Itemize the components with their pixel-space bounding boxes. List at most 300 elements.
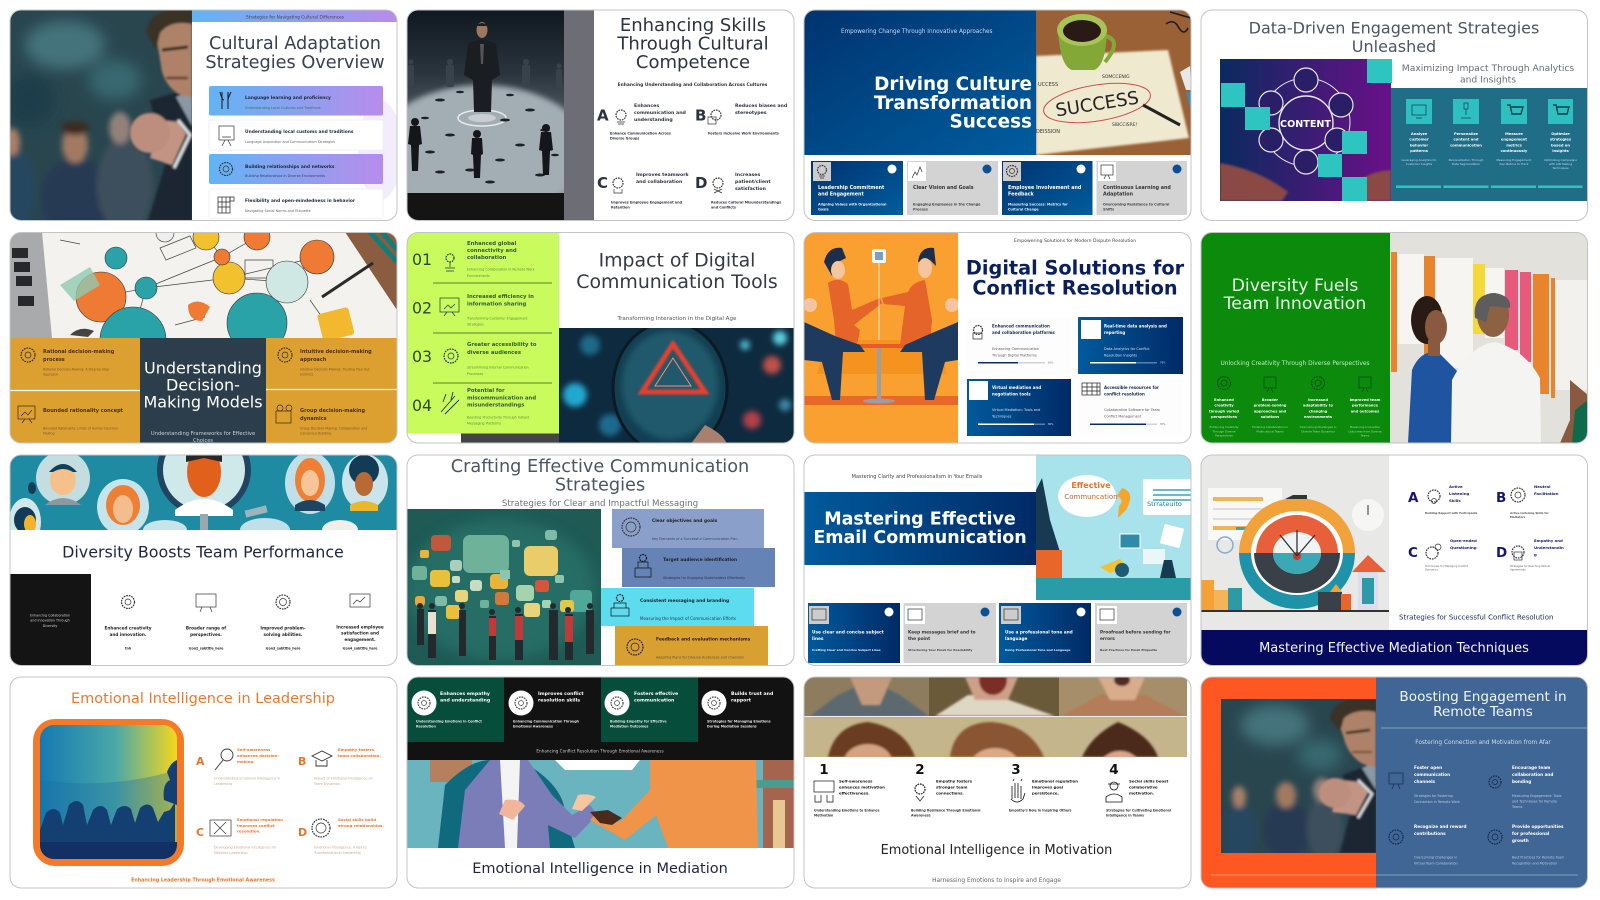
column: performance: performance bbox=[1352, 404, 1378, 408]
card: Impact of Digital Communication Tools bbox=[407, 232, 794, 454]
item 4: Intelligence in Teams bbox=[1106, 814, 1144, 818]
item: team bonding: and Techniques for Remote bbox=[1512, 800, 1557, 804]
card: Emotional Intelligence in Leadership bbox=[10, 677, 397, 888]
item: group: dynamics bbox=[300, 416, 327, 422]
tip: professional tone: language bbox=[1005, 636, 1028, 642]
feature card: learning: Adaptation bbox=[1103, 192, 1134, 198]
icon: tools tile bbox=[210, 820, 231, 836]
column: creativity: Perspectives bbox=[1215, 434, 1233, 438]
column: adaptability: Diverse Team Dynamics bbox=[1301, 429, 1335, 433]
item 04: misunderstandings bbox=[467, 403, 524, 409]
title: Cultural Adaptation bbox=[209, 34, 381, 54]
item: empathy: Understanding Emotions in Conflict bbox=[416, 720, 482, 724]
progress bars bbox=[1396, 186, 1582, 188]
item: open channels: Foster open bbox=[1414, 765, 1442, 770]
column: performance: Measuring Innovation bbox=[1350, 425, 1380, 429]
tip: brief messages: Structuring Your Email for Readability bbox=[908, 648, 972, 652]
item A: Enhance Communication Across bbox=[610, 132, 671, 136]
icon: gear bulb bbox=[1511, 488, 1525, 502]
item A bbox=[597, 103, 686, 140]
item: growth: growth bbox=[1512, 838, 1529, 843]
tip: proofread: errors bbox=[1100, 636, 1115, 642]
feature: mediation: Virtual mediation and bbox=[992, 385, 1041, 390]
item 04: Boosting Productivity Through Instant bbox=[467, 416, 530, 420]
icon: badge bbox=[412, 690, 436, 716]
column: problem solving: Fostering Collaboration in bbox=[1252, 425, 1288, 429]
icon: gears bbox=[1489, 776, 1501, 788]
icon: gear bulb bbox=[1218, 376, 1230, 390]
title: Crafting Effective Communication bbox=[451, 457, 749, 477]
icon: lightbulb tile bbox=[813, 162, 831, 181]
item C: C bbox=[196, 826, 204, 839]
item: flexibility: Navigating Social Norms and Etiquette bbox=[245, 209, 311, 213]
black side panel bbox=[10, 574, 91, 666]
feature: real-time data: Data Analytics for Conflict bbox=[1104, 347, 1150, 351]
item A: Self-awareness bbox=[237, 747, 271, 752]
title: Diversity Fuels bbox=[1232, 276, 1358, 296]
photo: six frustrated faces bbox=[804, 665, 1187, 783]
item: analyze: Customer Insights bbox=[1406, 162, 1433, 166]
title: Email Communication bbox=[813, 528, 1027, 548]
item: conflict skills: Improves conflict bbox=[538, 691, 584, 697]
item D: Strategies for Reaching Mutual bbox=[1510, 564, 1550, 568]
item: measure bbox=[1496, 99, 1532, 166]
title: Transformation bbox=[874, 93, 1032, 114]
card: Digital Solutions for Conflict Resolution bbox=[803, 232, 1191, 443]
item B: stereotypes bbox=[735, 110, 767, 116]
item: optimize: based on bbox=[1551, 143, 1570, 147]
title: Data-Driven Engagement Strategies bbox=[1249, 18, 1539, 38]
item 2: Empathy fosters bbox=[936, 778, 973, 784]
item: team bonding: Encourage team bbox=[1512, 765, 1551, 770]
icon: chart bbox=[350, 594, 370, 607]
item A: communication and bbox=[634, 110, 686, 116]
top band with subtitle: Strategies for Navigating Cultural Differences bbox=[246, 14, 345, 20]
item: recognition: Recognize and reward bbox=[1414, 824, 1466, 829]
feature: real-time data: Real-time data analysis and bbox=[1104, 324, 1167, 328]
item: team bonding: bonding bbox=[1512, 779, 1531, 784]
item 4: Social skills boost bbox=[1129, 778, 1168, 784]
item B bbox=[695, 103, 787, 136]
item: optimize: insights bbox=[1552, 149, 1570, 153]
item: measure: continuously bbox=[1501, 149, 1528, 153]
centre title panel bbox=[140, 338, 266, 443]
item C: Emotional regulation bbox=[237, 817, 283, 822]
icon: gear A bbox=[276, 595, 290, 609]
item: empathy bbox=[412, 690, 490, 728]
tagline: Mastering Clarity and Professionalism in Your Emails bbox=[852, 474, 983, 480]
item C: Improves teamwork bbox=[636, 172, 690, 178]
column: creativity: through varied bbox=[1209, 409, 1240, 413]
item: communication: communication bbox=[634, 698, 674, 704]
item D: satisfaction bbox=[735, 186, 766, 192]
item C: Open-ended bbox=[1450, 538, 1477, 543]
icon: lightbulb bbox=[915, 784, 925, 801]
item: language learning bbox=[209, 86, 383, 116]
item C: Improves Employee Engagement and bbox=[611, 200, 683, 204]
item: open channels: channels bbox=[1414, 779, 1436, 784]
column: creativity: Enhanced creativity bbox=[105, 626, 152, 630]
item A: Understanding Emotional Intelligence in bbox=[214, 776, 280, 780]
icon: gear A bbox=[312, 819, 330, 837]
item 1: Understanding Emotions to Enhance bbox=[814, 808, 880, 812]
feature card: involvement: Cultural Change bbox=[1008, 207, 1039, 211]
item: trust bbox=[702, 690, 773, 728]
title: Emotional Intelligence in Motivation bbox=[881, 843, 1112, 858]
illustration: silhouettes in orange frame bbox=[33, 719, 184, 866]
column: creativity: Enhancing Creativity bbox=[1209, 425, 1239, 429]
column: adaptability: adaptability to bbox=[1303, 404, 1333, 408]
tip: professional tone bbox=[999, 603, 1091, 663]
tip: professional tone: Using Professional Tone and Language bbox=[1005, 648, 1070, 652]
card: Mastering Effective Email Communication bbox=[804, 455, 1191, 666]
item 3: Emotional regulation bbox=[1032, 778, 1078, 784]
column: creativity bbox=[1209, 376, 1240, 438]
column: performance: Outcomes from Diverse bbox=[1348, 429, 1382, 433]
card: Cultural Adaptation Strategies Overview bbox=[10, 10, 396, 220]
item: optimize: Optimize bbox=[1551, 132, 1570, 136]
item A: understanding bbox=[634, 117, 673, 123]
feature: real-time data: 70% bbox=[1160, 360, 1166, 364]
tip: subject lines: Use clear and concise subject bbox=[812, 630, 884, 636]
icon: board tile bbox=[1098, 162, 1116, 181]
item: analyze: patterns bbox=[1410, 149, 1429, 153]
item 02: Transforming Customer Engagement bbox=[466, 316, 528, 320]
box: objectives: Clear objectives and goals bbox=[652, 518, 718, 524]
subtitle: Maximizing Impact Through Analytics bbox=[1402, 63, 1574, 74]
icon: gears bbox=[1488, 830, 1502, 844]
item: bounded: Bounded rationality concept bbox=[43, 408, 124, 414]
box: messaging: Consistent messaging and branding bbox=[640, 598, 729, 604]
icon: team bbox=[613, 178, 623, 193]
photo: coffee and SUCCESS notebook: SUCCESS bbox=[1054, 88, 1140, 121]
item: empathy: Enhances empathy bbox=[440, 691, 490, 697]
icon: gear A bbox=[622, 518, 640, 536]
feature: resources: Collaborative Software for Team bbox=[1104, 408, 1161, 412]
column: problem solving: solutions bbox=[1261, 415, 1279, 419]
item: group: Group Decision-Making: Collaboration and bbox=[300, 426, 367, 430]
item: growth: for professional bbox=[1512, 831, 1550, 836]
box: feedback: Feedback and evaluation mechanisms bbox=[656, 636, 751, 642]
item 01: Environments bbox=[467, 274, 490, 278]
item C: Developing Emotional Intelligence for bbox=[214, 846, 277, 850]
item 03 bbox=[412, 342, 537, 376]
feature: platforms bbox=[966, 317, 1071, 374]
feature card: leadership: Leadership Commitment bbox=[818, 185, 885, 191]
icon: gear A bbox=[278, 348, 292, 362]
item D: D bbox=[298, 826, 307, 839]
item: group: Consensus Building bbox=[300, 431, 331, 435]
title: Remote Teams bbox=[1433, 704, 1533, 720]
item 3: Empathy's Role in Inspiring Others bbox=[1009, 808, 1072, 812]
item: recognition: Virtual Team Collaboration bbox=[1414, 862, 1458, 866]
item D: Understandin bbox=[1534, 545, 1564, 550]
item: rational: Rational Decision-Making: A Step-by-Step bbox=[43, 368, 109, 372]
item: open channels bbox=[1389, 765, 1460, 804]
icon: presentation board bbox=[1389, 773, 1403, 789]
item 1: enhances motivation bbox=[839, 784, 885, 790]
blue hero panel bbox=[804, 10, 1036, 155]
box: audience: Strategies for Engaging Stakeholders Effectively bbox=[663, 576, 745, 580]
box: feedback bbox=[615, 626, 768, 666]
item: trust: rapport bbox=[731, 698, 752, 704]
column: problem solving: approaches and bbox=[1254, 409, 1287, 413]
feature card: leadership: and Engagement bbox=[818, 192, 864, 198]
icon: board bbox=[196, 594, 216, 612]
feature: platforms: Enhanced communication bbox=[992, 324, 1050, 328]
item B bbox=[298, 747, 381, 786]
illustration: dial gauge bbox=[1201, 455, 1389, 630]
item 04: Messaging Platforms bbox=[467, 422, 501, 426]
icon: chart board bbox=[1359, 377, 1371, 392]
illustration: two people talking bbox=[407, 760, 794, 848]
band caption: Enhancing Conflict Resolution Through Emotional Awareness bbox=[536, 748, 664, 754]
icon: badge bbox=[702, 690, 726, 716]
icon: chart tile bbox=[908, 162, 926, 181]
feature card: learning: Overcoming Resistance to Cultural bbox=[1103, 202, 1169, 206]
item: recognition bbox=[1389, 824, 1466, 866]
icon: network bbox=[444, 349, 458, 363]
item A: Enhances bbox=[634, 103, 659, 109]
illustration: effective communication scene: Effective bbox=[1071, 481, 1111, 490]
subtitle: Choices bbox=[193, 438, 213, 444]
title bar: Mastering Effective Mediation Techniques bbox=[1259, 641, 1529, 656]
item D: Agreements bbox=[1510, 568, 1526, 572]
item 03: 03 bbox=[412, 347, 432, 366]
item C: Effective Leadership bbox=[214, 851, 248, 855]
item: optimize bbox=[1544, 99, 1577, 170]
box: audience: Target audience identification bbox=[663, 557, 737, 563]
item: personalize: Data Segmentation bbox=[1452, 162, 1480, 166]
item: group: Group decision-making bbox=[300, 408, 365, 414]
item C: resolution. bbox=[237, 829, 261, 834]
box: audience bbox=[622, 548, 775, 587]
item A: enhances decision- bbox=[237, 753, 279, 758]
item D: D bbox=[1496, 545, 1507, 561]
illustration: effective communication scene: Communcation bbox=[1064, 493, 1118, 501]
box: objectives bbox=[612, 509, 764, 548]
item: optimize: Techniques bbox=[1551, 166, 1569, 170]
item: measure: Key Metrics to Track bbox=[1500, 162, 1529, 166]
tagline: Empowering Change Through Innovative Approaches bbox=[841, 29, 993, 35]
item D: Transformational Leadership bbox=[313, 851, 361, 855]
item: flexibility bbox=[209, 189, 383, 218]
photo: colleagues reviewing a wall board bbox=[1390, 232, 1588, 443]
item 1: Motivation bbox=[814, 814, 834, 818]
item: rational: Approach bbox=[43, 372, 58, 376]
feature: mediation: negotiation tools bbox=[992, 392, 1031, 396]
item D: Empathy and bbox=[1534, 538, 1563, 543]
photo: sketched mind map on desk bbox=[10, 224, 397, 373]
item: communication: Mediation Outcomes bbox=[610, 724, 648, 728]
photo: coffee and SUCCESS notebook bbox=[1036, 10, 1191, 155]
icon: cart bbox=[1507, 105, 1523, 114]
item: language learning: Understanding Local Customs and Traditions bbox=[245, 106, 321, 110]
item B: Mediators bbox=[1510, 515, 1526, 519]
item: local customs: Understanding local customs and traditions bbox=[245, 129, 354, 135]
item: measure: metrics bbox=[1506, 143, 1523, 147]
feature card: vision: Engaging Employees in the Change bbox=[913, 202, 981, 206]
item: bounded: Making bbox=[43, 431, 54, 435]
item: conflict skills: resolution skills bbox=[538, 698, 580, 704]
box: objectives: Key Elements of a Successful Communication Plan bbox=[652, 537, 738, 541]
icon: graduation cap bbox=[312, 751, 332, 766]
feature: platforms: Enhancing Communication bbox=[992, 347, 1039, 351]
item B: Active Listening Skills for bbox=[1510, 511, 1549, 515]
black side panel: and Innovation Through bbox=[30, 619, 70, 623]
item C: improves conflict bbox=[237, 823, 275, 828]
item 04: miscommunication and bbox=[467, 395, 536, 401]
item: growth: Recognition and Motivation bbox=[1512, 862, 1557, 866]
column: satisfaction: satisfaction and bbox=[341, 631, 379, 636]
box: feedback: Adapting Plans for Diverse Audiences and Channels bbox=[656, 656, 744, 660]
item 1: effectiveness. bbox=[839, 790, 870, 796]
item 1: Self-awareness bbox=[839, 778, 873, 784]
title: Strategies Overview bbox=[205, 53, 385, 73]
item A: Diverse Groups bbox=[610, 136, 639, 140]
item C: C bbox=[1408, 545, 1418, 561]
item 4: Strategies for Cultivating Emotional bbox=[1106, 808, 1171, 812]
card: Driving Culture Transformation Success bbox=[804, 10, 1191, 221]
feature: real-time data: reporting bbox=[1104, 330, 1125, 335]
item: conflict skills: Emotional Awareness bbox=[513, 724, 553, 728]
item: rational bbox=[21, 348, 115, 376]
icon: gear A bbox=[1312, 376, 1324, 390]
item D: D bbox=[695, 174, 707, 192]
item C bbox=[196, 817, 283, 855]
item A: Skills bbox=[1449, 498, 1461, 503]
column: creativity: Enhanced bbox=[1214, 398, 1234, 402]
column: creativity: and innovation. bbox=[110, 632, 147, 637]
icon: tile bbox=[1081, 320, 1101, 339]
item 4: collaborative bbox=[1129, 784, 1158, 790]
item B: B bbox=[1496, 490, 1506, 506]
item 2: 2 bbox=[915, 762, 925, 778]
title: Competence bbox=[636, 52, 750, 73]
item D: patient/client bbox=[735, 179, 771, 185]
item B: Fosters Inclusive Work Environments bbox=[708, 132, 779, 136]
icon: utensils bbox=[220, 92, 231, 109]
icon: gear bulb bbox=[122, 596, 134, 608]
item D: strong relationships. bbox=[338, 823, 384, 828]
subtitle: Understanding Frameworks for Effective bbox=[151, 431, 255, 437]
icon: worker bbox=[1106, 782, 1122, 802]
icon: brain and target bbox=[1426, 544, 1441, 559]
feature: platforms: Through Digital Platforms bbox=[991, 353, 1037, 357]
column: adaptability: environments bbox=[1304, 415, 1332, 419]
item 2 bbox=[911, 762, 980, 818]
item C: and collaboration bbox=[636, 179, 682, 185]
column: creativity: creativity bbox=[1214, 404, 1234, 408]
feature card: leadership bbox=[811, 161, 903, 215]
item: bounded: Bounded Rationality: Limits of Human Decision- bbox=[43, 426, 119, 430]
item A bbox=[196, 747, 280, 786]
item B: Facilitation bbox=[1534, 491, 1559, 496]
item A: Listening bbox=[1449, 491, 1470, 496]
item: open channels: communication bbox=[1414, 772, 1450, 777]
item 3: improves goal bbox=[1032, 784, 1063, 790]
item 02: information sharing bbox=[467, 302, 527, 308]
illustration: effective communication scene: Strrateuito bbox=[1147, 500, 1182, 508]
icon: board bbox=[1264, 377, 1276, 392]
column: creativity: tnh bbox=[125, 646, 132, 650]
tip: brief messages: Keep messages brief and to bbox=[908, 630, 976, 636]
divider line bbox=[1381, 727, 1587, 729]
column: creativity: perspectives bbox=[1211, 415, 1237, 419]
feature card: learning bbox=[1096, 161, 1187, 215]
item: trust: Builds trust and bbox=[731, 691, 773, 697]
feature: resources bbox=[1078, 379, 1183, 436]
item 01: collaboration bbox=[467, 255, 507, 261]
icon: presentation board bbox=[219, 126, 234, 146]
photo: coffee and SUCCESS notebook: SOMCCENIG bbox=[1102, 74, 1130, 80]
item: relationships bbox=[209, 154, 383, 184]
subtitle: Strategies for Clear and Impactful Messaging bbox=[502, 499, 698, 509]
header band bbox=[407, 677, 794, 760]
item D bbox=[1496, 538, 1564, 572]
box: messaging: Measuring the Impact of Communication Efforts bbox=[640, 616, 736, 621]
item 03: diverse audiences bbox=[467, 350, 521, 356]
item: personalize bbox=[1449, 99, 1484, 166]
photo: coffee and SUCCESS notebook: SIBCCISRE! bbox=[1112, 122, 1138, 128]
item: trust: During Mediation Sessions bbox=[707, 724, 757, 728]
dark strip under photo bbox=[407, 193, 564, 221]
photo: man pointing with team behind bbox=[10, 10, 192, 220]
feature card: leadership: Aligning Values with Organizational bbox=[818, 202, 886, 206]
feature: mediation bbox=[967, 379, 1071, 436]
title: Digital Solutions for bbox=[966, 256, 1185, 280]
column: satisfaction: Increased employee bbox=[336, 624, 384, 630]
item: measure: engagement bbox=[1501, 138, 1527, 142]
icon: network bbox=[627, 639, 643, 655]
item: analyze: customer bbox=[1409, 138, 1429, 142]
item: communication: Fosters effective bbox=[634, 691, 678, 697]
illustration: effective communication scene bbox=[1036, 455, 1191, 600]
feature card: involvement: Measuring Success: Metrics for bbox=[1008, 202, 1068, 206]
icon: cart bbox=[1553, 105, 1569, 114]
tip: brief messages bbox=[904, 603, 996, 663]
column: perspectives: icon2_subtitle_here bbox=[189, 646, 223, 650]
column: creativity: Through Diverse bbox=[1211, 429, 1236, 433]
item A: A bbox=[1408, 490, 1419, 506]
icon: building grid bbox=[218, 197, 234, 213]
dark footer strip bbox=[461, 434, 559, 444]
item: open channels: Connection in Remote Work bbox=[1414, 800, 1460, 804]
item: optimize: with A/B Testing bbox=[1549, 162, 1572, 166]
item 04: Potential for bbox=[467, 388, 505, 394]
feature: platforms: 60% bbox=[1048, 360, 1054, 364]
item D: Increases bbox=[735, 172, 760, 178]
column: perspectives: perspectives. bbox=[190, 632, 222, 637]
item C: Retention bbox=[611, 206, 630, 210]
blue content panel bbox=[1376, 677, 1588, 888]
item: recognition: Overcoming Challenges in bbox=[1414, 856, 1457, 860]
title: Diversity Boosts Team Performance bbox=[62, 542, 344, 562]
title: Strategies bbox=[555, 475, 645, 495]
feature: resources: Accessible resources for bbox=[1104, 385, 1159, 390]
column: perspectives bbox=[186, 594, 226, 650]
item 3: persistence. bbox=[1032, 790, 1060, 796]
item: intuitive: Intuitive Decision-Making: Trusting Your Gut bbox=[300, 368, 370, 372]
feature: real-time data: Resolution Insights bbox=[1104, 353, 1137, 357]
icon: badge bbox=[604, 690, 630, 716]
item: local customs: Language Acquisition and Communication Strategies bbox=[245, 140, 335, 144]
item 3 bbox=[1009, 762, 1078, 812]
title: Team Innovation bbox=[1223, 294, 1366, 314]
item: communication: Building Empathy for Effective bbox=[610, 720, 667, 724]
item: growth: Provide opportunities bbox=[1512, 824, 1564, 829]
feature card: vision: Process bbox=[913, 207, 928, 211]
